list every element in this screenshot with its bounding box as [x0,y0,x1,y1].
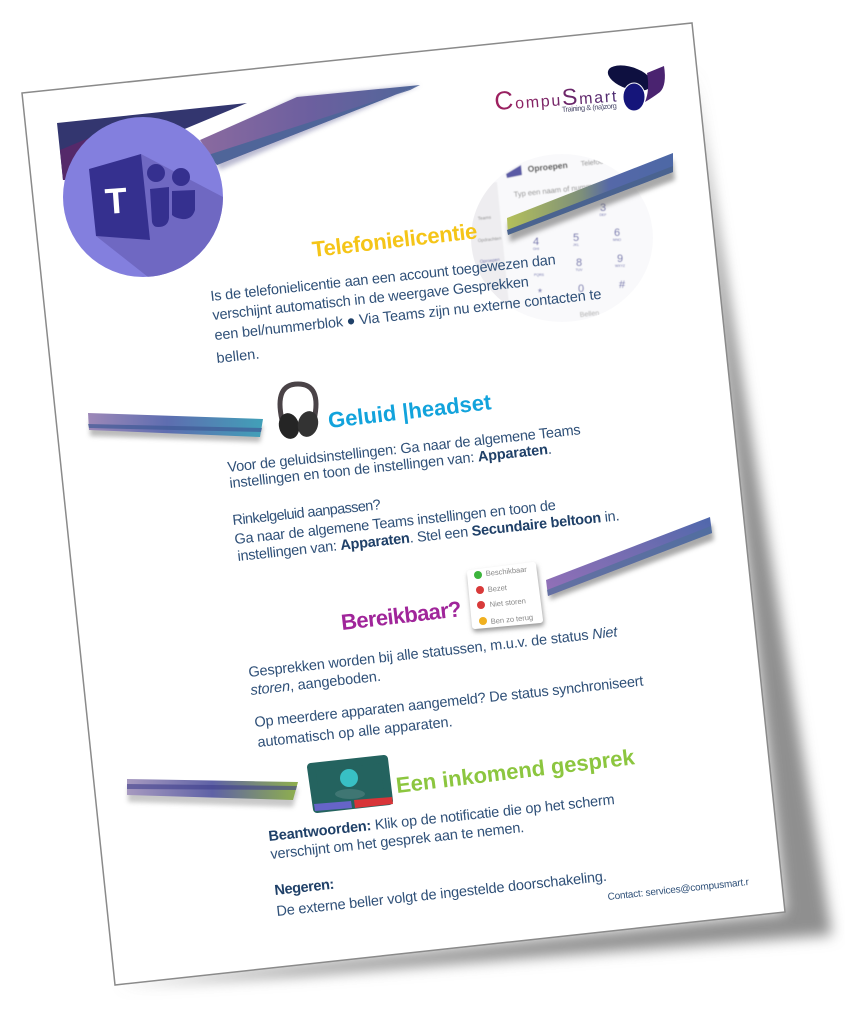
text: inkomend gesprek body: verschijnt om het gesprek aan te nemen. [270,820,525,863]
icon: headset [276,384,321,441]
text: bereikbaar body: storen, aangeboden. [250,669,382,699]
screenshot: Teams dial pad: # [619,279,626,291]
screenshot: Teams dial pad: Teams [478,215,492,221]
header banner stripes [57,85,420,180]
heading: Telefonielicentie: Telefonielicentie [311,218,478,262]
logo: CompuSmart: CompuSmart [493,78,618,116]
screenshot: Teams dial pad: JKL [573,243,579,247]
screenshot: Teams dial pad: WXYZ [615,264,626,268]
heading: Bereikbaar: Bereikbaar? [340,596,463,635]
contact line: Contact: services@compusmart.r [607,877,750,903]
text: telefonielicentie body [210,252,602,367]
screenshot: Teams dial pad: 3 [600,202,606,214]
text: inkomend gesprek body: De externe beller volgt de ingestelde doorschakeling. [276,869,608,920]
heading: Een inkomend gesprek: Een inkomend gesprek [395,744,637,798]
paper shadow [118,70,832,985]
text: bereikbaar body [248,624,644,751]
text: geluid body: Voor de geluidsinstellingen: Ga naar de algemene Teams [227,422,581,476]
text: geluid body [227,422,620,565]
screenshot: Teams dial pad: 8 [576,257,582,269]
notification card [311,759,393,811]
decorative bar: inkomend gesprek [127,779,298,807]
text: geluid body: instellingen en toon de instellingen van: Apparaten. [229,442,553,492]
text: telefonielicentie body: bellen. [216,346,260,367]
text: telefonielicentie body: een bel/nummerblok ● Via Teams zijn nu externe contacten te [214,287,602,344]
screenshot: Teams dial pad: Telefoo [580,159,604,168]
text: bereikbaar body: automatisch op alle apparaten. [257,714,453,751]
screenshot: Teams dial pad: TUV [576,268,583,272]
logo: CompuSmart: Training & (na)zorg [562,101,617,114]
screenshot: Teams dial pad: Oproepen [480,257,501,264]
text: geluid body: instellingen van: Apparaten. Stel een Secundaire beltoon in. [237,508,620,565]
text: inkomend gesprek body [268,792,615,920]
text: inkomend gesprek body: Negeren: [274,877,335,899]
text: telefonielicentie body: Is de telefonielicentie aan een account toegewezen dan [210,252,556,305]
screenshot: Teams dial pad: MNO [613,238,621,242]
screenshot: Teams dial pad: * [538,287,543,299]
screenshot: Teams dial pad: Opdrachten [478,236,502,243]
decorative bar: geluid [88,413,263,442]
screenshot: Teams dial pad: Typ een naam of nummer [513,181,600,199]
logo: CompuSmart [493,60,665,116]
status card: Bezet [487,583,508,594]
screenshot: Teams dial pad: PQRS [534,273,545,277]
screenshot: Teams dial pad [465,150,675,325]
text: bereikbaar body: Op meerdere apparaten aangemeld? De status synchroniseert [254,674,644,731]
text: inkomend gesprek body: Beantwoorden: Klik op de notificatie die op het scherm [268,792,615,845]
screenshot: Teams dial pad: Oproepen [527,160,568,174]
text: telefonielicentie body: verschijnt automatisch in de weergave Gesprekken [212,274,530,324]
icon: Microsoft Teams logo: T [104,180,129,222]
screenshot: Teams dial pad: Bellen [579,310,600,319]
screenshot: Teams dial pad: GHI [533,247,539,251]
status card: Ben zo terug [490,613,534,626]
text: bereikbaar body: Gesprekken worden bij alle statussen, m.u.v. de status Niet [248,624,619,681]
screenshot: Teams dial pad: 6 [614,227,620,239]
screenshot: Teams dial pad: 5 [573,232,579,244]
screenshot: Teams dial pad: 0 [578,283,584,295]
screenshot: Teams dial pad: DEF [600,213,606,217]
decorative bar: bereikbaar [546,517,714,600]
status card: Beschikbaar [485,565,528,578]
text: geluid body: Rinkelgeluid aanpassen? [232,497,382,529]
icon: Microsoft Teams logo [63,117,223,277]
screenshot: Teams dial pad: 9 [617,253,623,265]
text: geluid body: Ga naar de algemene Teams instellingen en toon de [234,498,557,548]
screenshot: Teams dial pad: 4 [533,236,539,248]
status card: Niet storen [489,596,526,609]
heading: Geluid headset: Geluid |headset [327,389,493,433]
status card [470,565,541,629]
